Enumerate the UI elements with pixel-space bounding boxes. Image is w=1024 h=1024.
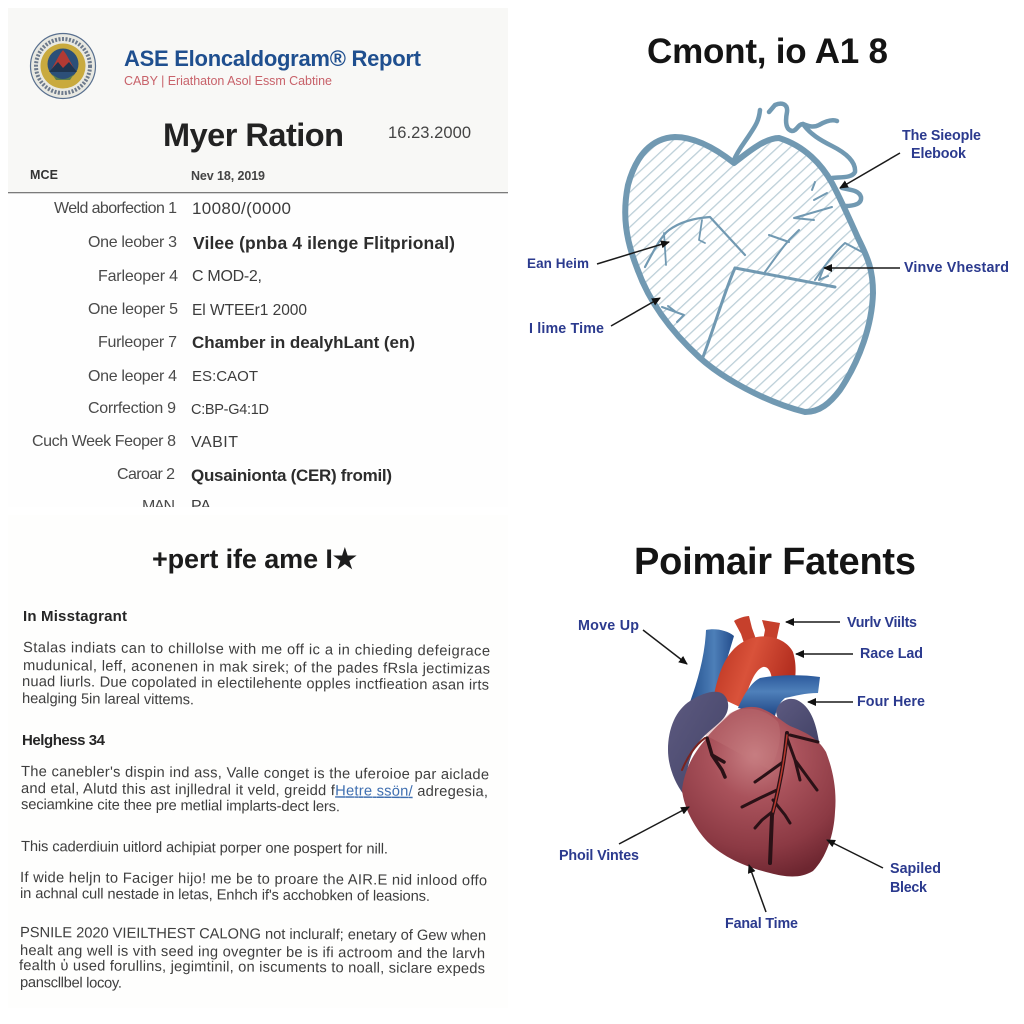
section: In Misstagrant: healging 5in lareal vittems. [22, 691, 194, 708]
data rows: C:BP-G4:1D [191, 402, 269, 418]
paragraph: wide heljn: in achnal cull nestade in letas, Enhch if's acchobken of leasions. [20, 886, 430, 905]
data rows: Vilee (pnba 4 ilenge Flitprional) [193, 233, 455, 253]
data rows: MAN [142, 498, 175, 515]
callout: Vurlv Viilts: Vurlv Viilts [847, 615, 917, 631]
heading: document name: Myer Ration [163, 117, 344, 153]
section: In Misstagrant: mudunical, leff, aconenen in mak sirek; of the pades fRsla jectimizas [23, 658, 490, 678]
data rows: ES:CAOT [192, 368, 258, 385]
column header date: Nev 18, 2019 [191, 169, 265, 183]
callout: Ean Heim [527, 242, 669, 271]
heading: anatomical heart: Poimair Fatents [634, 541, 916, 583]
callout: The Sieople Elebook: Elebook [911, 146, 966, 162]
data rows [32, 199, 455, 515]
callout: Four Here [808, 694, 925, 710]
callout: The Sieople Elebook: The Sieople [902, 128, 981, 144]
callout: I lime Time: I lime Time [529, 321, 604, 337]
paragraph: PSNILE 2020: fealth ὑ used forullins, jegimtinil, on iscuments to noall, siclare expeds [19, 958, 485, 977]
paragraph: PSNILE 2020 [19, 925, 486, 992]
icon: seal logo [30, 34, 96, 98]
coronary vessels [682, 733, 818, 863]
section: Helghess 34: The canebler's dispin ind ass, Valle conget is the uferoioe par aiclade [21, 764, 489, 783]
section: In Misstagrant: In Misstagrant [23, 608, 127, 625]
panel: text article [8, 515, 508, 1008]
panel: anatomical heart diagram [559, 541, 941, 932]
data rows: El WTEEr1 2000 [192, 302, 307, 319]
column header left: MCE [30, 168, 58, 182]
panel: report sheet [8, 8, 508, 515]
data rows: 10080/(0000 [192, 199, 291, 218]
vessels on top of heart [734, 104, 861, 206]
heading: report title: ASE Eloncaldogram® Report [124, 46, 422, 71]
paragraph: PSNILE 2020: healt ang well is vith seed ing ovegnter be is ifi actroom and the larvh [20, 943, 485, 962]
paragraph: caderdiuin: This caderdiuin uitlord achipiat porper one pospert for nill. [21, 839, 388, 858]
data rows: Cuch Week Feoper 8 [32, 433, 176, 450]
section: In Misstagrant [22, 608, 490, 708]
data rows: Weld aborfection 1 [54, 200, 177, 217]
section: Helghess 34 [21, 732, 489, 815]
data rows: Farleoper 4 [98, 268, 178, 285]
callout: Race Lad [796, 646, 923, 662]
callout: I lime Time [529, 298, 660, 337]
callout: Sapiled Bleck: Sapiled [890, 861, 941, 877]
data rows: Chamber in dealyhLant (en) [192, 333, 415, 352]
panel: outline heart diagram [527, 32, 1009, 412]
callout: Vurlv Viilts [786, 615, 917, 631]
pulmonary artery [738, 675, 820, 716]
callout: Phoil Vintes: Phoil Vintes [559, 848, 639, 864]
left atrium [668, 692, 728, 795]
data rows: One leober 3 [88, 234, 177, 251]
callout: The Sieople Elebook [840, 128, 981, 188]
section: In Misstagrant: nuad liurls. Due copolated in electilehente opples inctfieation asan irts [22, 674, 489, 694]
data rows: VABIT [191, 434, 238, 451]
data rows: One leoper 5 [88, 301, 178, 318]
callout: Phoil Vintes [559, 807, 689, 864]
superior vena cava [690, 629, 734, 702]
paragraph: PSNILE 2020: panscllbel locoy. [20, 975, 122, 992]
data rows: Furleoper 7 [98, 334, 177, 351]
heading: outline heart: Cmont, io A1 8 [647, 32, 888, 71]
data rows: Caroar 2 [117, 466, 175, 483]
heading: article title: +pert ife ame I★ [152, 544, 357, 574]
callout: Vinve Vhestard: Vinve Vhestard [904, 260, 1009, 276]
aortic arch [714, 636, 796, 708]
upper chamber shading [705, 709, 780, 770]
ventricle body [682, 707, 836, 876]
aortic branches [734, 616, 780, 646]
data rows: C MOD-2, [192, 268, 262, 285]
illustration: hatched heart [625, 104, 873, 412]
data rows: Corrfection 9 [88, 400, 176, 417]
data rows: Qusainionta (CER) fromil) [191, 466, 392, 485]
section: Helghess 34: Helghess 34 [22, 732, 106, 749]
section: Helghess 34: seciamkine cite thee pre metlial implarts-dect lers. [21, 797, 340, 815]
internal lines [645, 182, 862, 357]
callout: Sapiled Bleck [827, 840, 941, 896]
paragraph: wide heljn [20, 870, 487, 905]
callout: Move Up [578, 618, 687, 664]
document number: 16.23.2000 [388, 124, 471, 142]
callout: Sapiled Bleck: Bleck [890, 880, 927, 896]
callout: Move Up: Move Up [578, 618, 639, 634]
paragraph: PSNILE 2020: PSNILE 2020 VIEILTHEST CALONG not incluralf; enetary of Gew when [20, 925, 486, 944]
section: Helghess 34: and etal, Alutd this ast injlledral it veld, greidd fHetre ssön/ adregesia, [21, 781, 488, 800]
illustration: realistic heart [668, 616, 836, 876]
data rows: One leoper 4 [88, 368, 177, 385]
right atrium [776, 699, 819, 742]
section: In Misstagrant: Stalas indiats can to chillolse with me off ic a in chieding defeigrace [23, 640, 490, 660]
report subtitle: CABY | Eriathaton Asol Essm Cabtine [124, 74, 332, 88]
callout: Fanal Time [725, 865, 798, 932]
callout: Ean Heim: Ean Heim [527, 256, 589, 271]
callout: Fanal Time: Fanal Time [725, 916, 798, 932]
callout: Race Lad: Race Lad [860, 646, 923, 662]
data rows: PA .. [191, 498, 223, 515]
paragraph: wide heljn: If wide heljn to Faciger hijo! me be to proare the AIR.E nid inlood offo [20, 870, 487, 889]
callout: Four Here: Four Here [857, 694, 925, 710]
